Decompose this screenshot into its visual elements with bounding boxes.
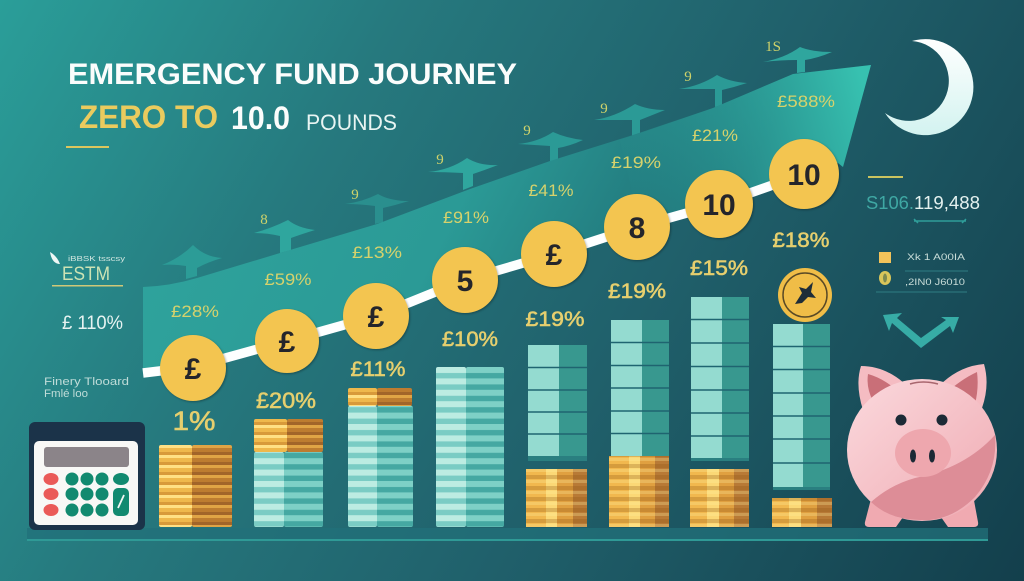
subtitle [79,99,397,136]
percentage labels on band: £41% [528,181,574,200]
subtitle: 10.0 [231,100,290,136]
panel: left stats: £ 110% [62,313,123,334]
coin 5 [521,221,587,287]
icon: calculator [29,422,145,530]
coin 2 [255,309,319,373]
percentage labels on band: £588% [777,92,835,111]
coin 4: 5 [457,265,473,298]
coin 6 [604,194,670,260]
small milestone numbers: 9 [684,69,692,85]
coin 1 [160,335,226,401]
small milestone numbers: 1S [765,39,781,55]
percentage labels above stacks: £15% [690,257,748,280]
pig eyes [896,414,906,426]
coin 8: 10 [787,159,821,192]
icon: leaf [50,252,60,264]
stack 4: teal coins [436,367,504,527]
coin 2: £ [279,326,296,359]
coin 5: £ [546,239,563,272]
coin 3: £ [368,301,385,334]
pig body [847,379,997,521]
small milestone numbers: 9 [436,152,444,168]
small milestone numbers: 9 [523,123,531,139]
coin 7: 10 [702,189,736,222]
coin 3 [343,283,409,349]
percentage labels above stacks: 1% [172,406,216,436]
signpost markers [162,47,832,279]
subtitle: ZERO TO [79,99,218,135]
coin 1: £ [185,353,202,386]
stack 3: gold and teal coins [348,388,413,527]
percentage labels above stacks: £10% [442,328,498,351]
icon: crescent moon [885,39,973,135]
progress line [143,174,804,373]
legend [876,252,968,292]
small milestone numbers: 8 [260,212,268,228]
pig snout [895,429,951,477]
stack 1: gold coins [159,445,232,527]
small milestone numbers [260,39,781,228]
panel: left stats: Finery Tlooard [44,376,129,388]
percentage labels on band: £59% [264,270,312,289]
pig ears [858,364,987,410]
small milestone numbers: 9 [600,101,608,117]
percentage labels above stacks [172,229,830,436]
legend: Xk 1 A00IA [907,252,965,262]
stack 7: blocks and gold [690,297,749,527]
percentage labels above stacks: £18% [772,229,830,252]
pig feet [865,495,978,527]
percentage labels on band [171,92,835,321]
percentage labels above stacks: £19% [608,280,666,303]
percentage labels above stacks: £19% [526,308,584,331]
icon: double arrow [883,313,959,348]
pig slot [910,382,938,384]
pig shading [871,435,995,520]
arrow band [143,65,871,373]
floor shelf [27,528,988,541]
panel: total amount: 119,488 [914,193,980,213]
coin 4 [432,247,498,313]
title underline [66,146,109,148]
percentage labels on band: £91% [443,208,489,227]
title: EMERGENCY FUND JOURNEY [68,58,517,91]
percentage labels above stacks: £11% [350,358,406,381]
stack 5: blocks and gold [526,345,587,527]
percentage labels on band: £28% [171,302,219,321]
icon: piggy bank [847,364,997,527]
panel: left stats: ESTM [62,264,110,285]
stack 2: gold and teal coins [254,419,323,527]
icon: medal coin [778,268,832,322]
percentage labels on band: £21% [692,126,738,145]
stack 6: blocks and gold [609,320,669,527]
percentage labels on band: £19% [611,153,661,172]
panel: left stats: iBBSK tsscsy [68,254,125,263]
small milestone numbers: 9 [351,187,359,203]
percentage labels on band: £13% [352,243,402,262]
percentage labels above stacks: £20% [256,388,316,413]
panel: left stats [44,252,129,400]
coin 6: 8 [629,212,645,245]
coin 7 [685,170,753,238]
coin 8 [769,139,839,209]
panel: left stats: Fmlé loo [44,388,88,400]
panel: total amount [866,176,980,223]
panel: total amount: S106. [866,193,914,213]
legend: ,2IN0 J6010 [905,277,965,287]
subtitle: POUNDS [306,110,397,135]
stack 8: blocks and gold [772,324,832,527]
coin markers [160,139,839,401]
